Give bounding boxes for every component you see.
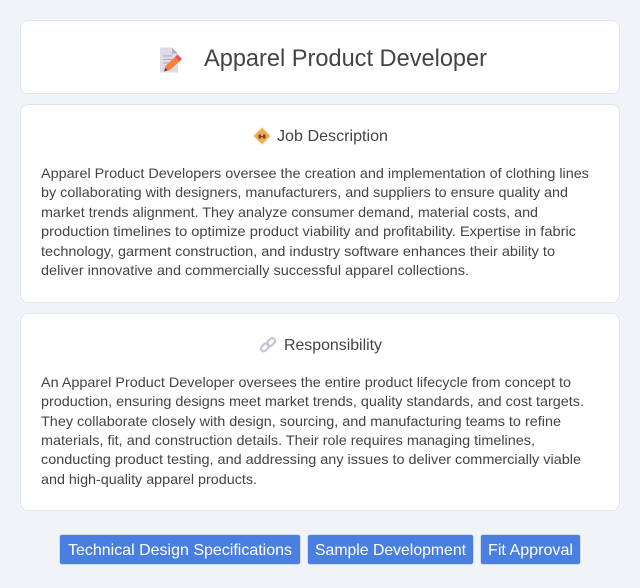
text block: job description: Apparel Product Developers oversee the creation and implementation of clothing lines (41, 165, 589, 181)
tag: technical design specifications: Technical Design Specifications (68, 542, 292, 559)
icon: document with pencil (160, 48, 182, 72)
text block: responsibility: production, ensuring designs meet market trends, quality standards, and cost targets. (41, 393, 584, 409)
heading: responsibility: Responsibility (284, 337, 382, 354)
text block: responsibility: and high-quality apparel products. (41, 471, 257, 487)
text block: job description: deliver innovative and commercially successful apparel collections. (41, 262, 469, 278)
tag: sample development: Sample Development (315, 542, 467, 559)
title: Apparel Product Developer (204, 45, 487, 72)
text block: job description: by collaborating with designers, manufacturers, and suppliers to ensure quality and (41, 184, 568, 200)
icon: orange diamond (254, 128, 270, 144)
text block: job description (41, 165, 589, 278)
panel: job description (20, 104, 620, 303)
text block: job description: market trends alignment. They analyze consumer demand, material costs, and (41, 204, 538, 220)
tag: sample development (307, 534, 474, 565)
panel: header (20, 20, 620, 94)
text block: job description: technology, garment construction, and industry software enhances their ability to (41, 243, 555, 259)
text block: responsibility: An Apparel Product Developer oversees the entire product lifecycle from concept to (41, 374, 571, 390)
tag: fit approval (480, 534, 581, 565)
text block: job description: production timelines to optimize product viability and profitability. Expertise in fabric (41, 223, 576, 239)
tag: fit approval: Fit Approval (488, 542, 573, 559)
tag: technical design specifications (59, 534, 301, 565)
text block: responsibility: materials, fit, and construction details. Their role requires managing timelines, (41, 432, 535, 448)
panel: responsibility (20, 313, 620, 511)
text block: responsibility: They collaborate closely with design, sourcing, and manufacturing teams to refine (41, 413, 561, 429)
text block: responsibility: conducting product testing, and addressing any issues to deliver commercially viable (41, 451, 581, 467)
heading: job description: Job Description (277, 128, 388, 145)
icon: chain link (260, 337, 276, 352)
